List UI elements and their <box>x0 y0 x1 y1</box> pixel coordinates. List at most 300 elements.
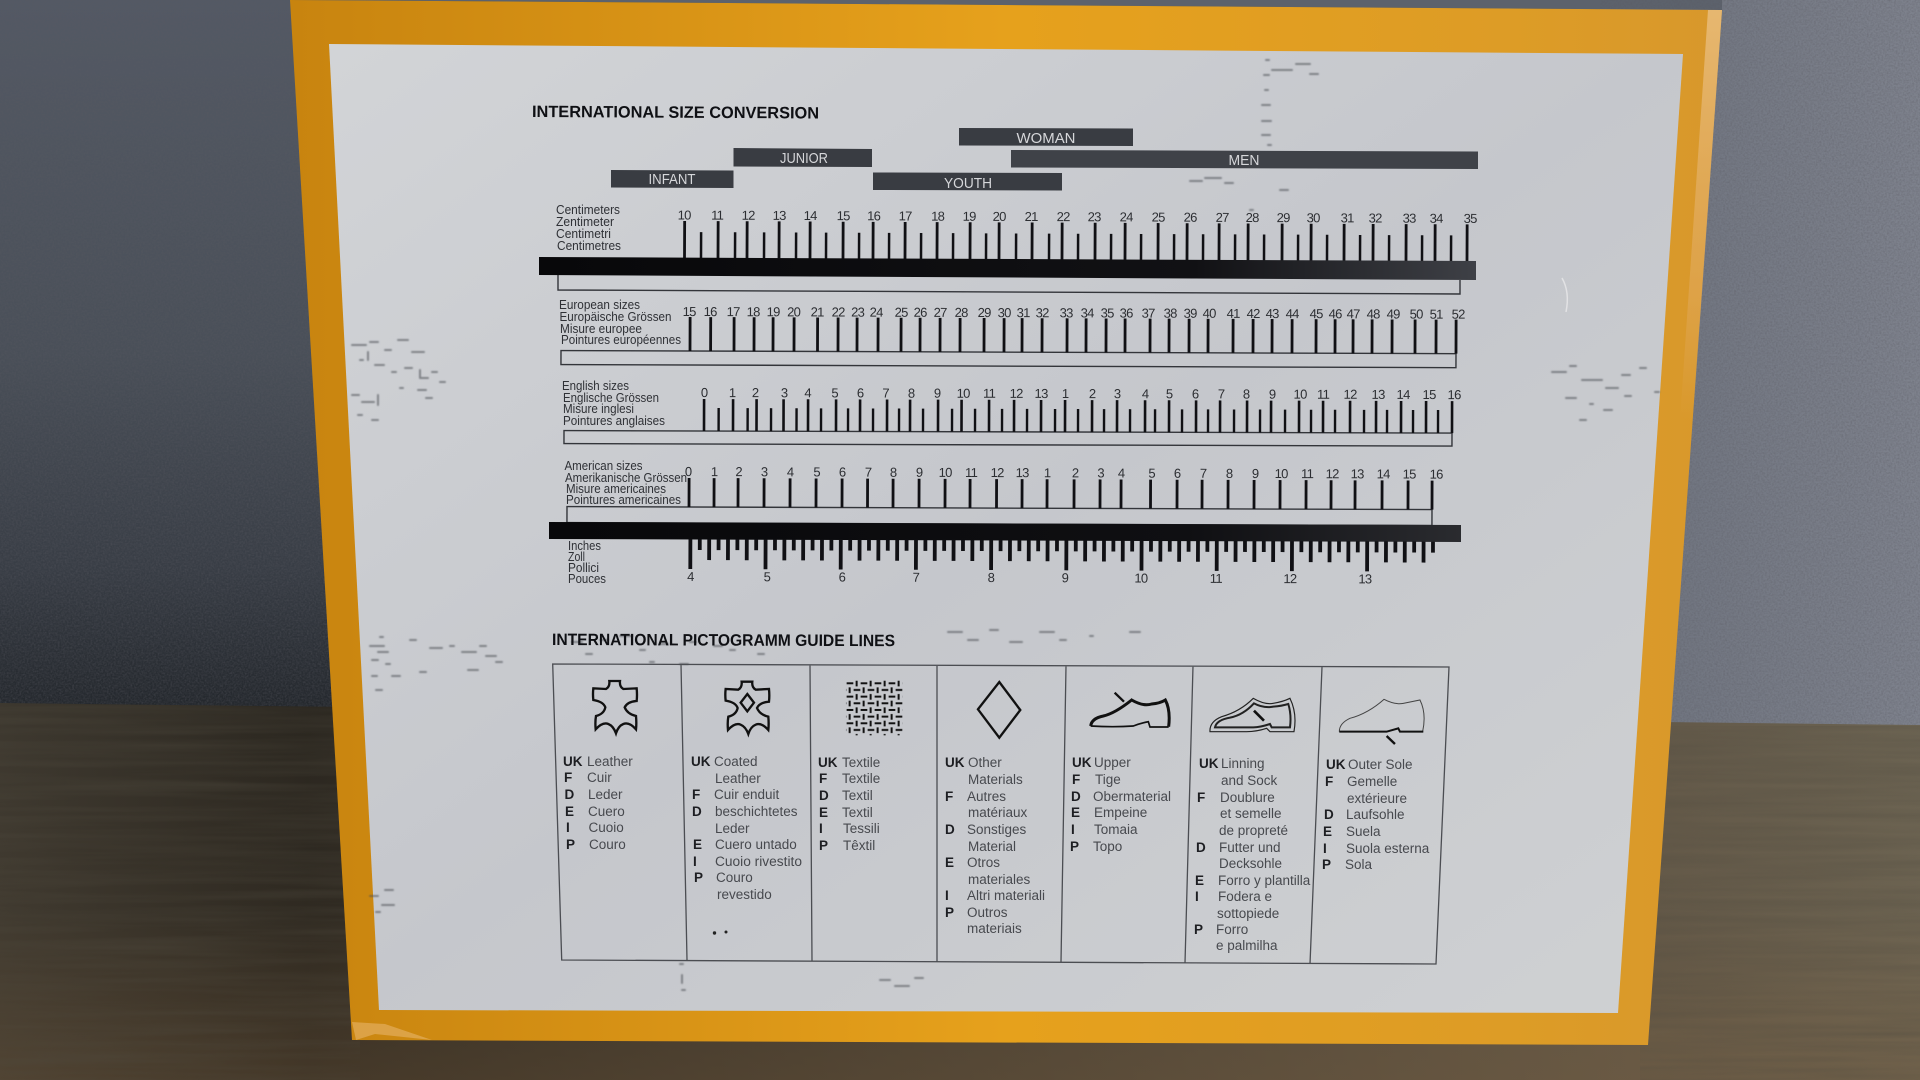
ticks and numbers: english sizes: 12 <box>1344 387 1357 402</box>
text: lining and sock: sottopiede <box>1217 906 1279 921</box>
ticks and numbers: centimeters: 18 <box>931 209 945 224</box>
bar: woman <box>959 128 1133 147</box>
icon: coated leather hide <box>725 682 769 734</box>
text: other materials <box>945 755 1045 936</box>
heavy black bar: centimeters <box>539 257 1476 280</box>
pictogram table <box>553 664 1449 964</box>
bar: junior: JUNIOR <box>780 150 828 167</box>
text: coated leather: Cuir enduit <box>714 787 780 802</box>
ticks and numbers: american sizes: 11 <box>965 465 978 480</box>
labels: centimeters: Zentimeter <box>556 215 614 229</box>
ticks and numbers: european sizes: 35 <box>1101 305 1114 320</box>
ticks and numbers: inches: 7 <box>913 570 920 585</box>
text: outer sole: D <box>1324 807 1334 822</box>
ticks and numbers: centimeters: 33 <box>1403 211 1416 226</box>
text: lining and sock: e palmilha <box>1216 938 1278 953</box>
text: leather: UK <box>563 754 583 769</box>
text: other materials: P <box>945 905 954 920</box>
ticks and numbers: english sizes <box>564 385 1461 446</box>
ticks and numbers: american sizes: 16 <box>1430 467 1443 482</box>
background: top wall strip <box>290 0 1722 10</box>
ruler: european sizes <box>559 298 1465 368</box>
ticks and numbers: european sizes: 27 <box>934 305 947 320</box>
text: leather: F <box>564 770 572 785</box>
ticks and numbers: english sizes: 5 <box>1166 386 1173 401</box>
ticks and numbers: european sizes: 48 <box>1367 306 1380 321</box>
text: outer sole: Sola <box>1345 857 1373 872</box>
ticks and numbers: centimeters: 10 <box>678 207 691 223</box>
column: leather <box>563 681 637 852</box>
ticks and numbers: european sizes: 31 <box>1017 305 1030 320</box>
ticks and numbers: american sizes: 3 <box>1097 465 1104 480</box>
text: coated leather: Couro <box>716 870 753 885</box>
labels: inches: Pollici <box>568 561 599 575</box>
ticks and numbers: european sizes: 22 <box>832 304 845 320</box>
ticks and numbers: european sizes: 43 <box>1266 306 1279 321</box>
ticks and numbers: european sizes: 39 <box>1184 306 1197 321</box>
text: leather: Leder <box>588 787 623 802</box>
ticks and numbers: american sizes: 2 <box>735 464 742 479</box>
text: lining and sock: I <box>1195 889 1199 904</box>
ticks and numbers: european sizes: 40 <box>1203 306 1216 321</box>
text: leather: D <box>564 787 574 802</box>
text: coated leather: revestido <box>717 887 772 902</box>
text: coated leather: beschichtetes <box>715 804 798 819</box>
icon: shoe upper <box>1091 693 1169 727</box>
labels: centimeters: Centimeters <box>556 203 620 217</box>
text: other materials: Material <box>968 839 1016 854</box>
ticks and numbers: european sizes: 25 <box>895 305 908 320</box>
ticks and numbers: european sizes: 17 <box>727 304 740 319</box>
ticks and numbers: european sizes: 52 <box>1452 307 1465 322</box>
heavy black bar: inches <box>549 522 1461 542</box>
text: textile: P <box>819 838 828 853</box>
ticks and numbers: european sizes: 20 <box>787 304 801 319</box>
ticks and numbers: centimeters: 16 <box>867 208 881 223</box>
text: lining and sock <box>1194 756 1311 953</box>
ticks and numbers: centimeters: 29 <box>1277 210 1290 225</box>
bar: infant: INFANT <box>648 171 696 188</box>
ticks and numbers: european sizes: 50 <box>1410 307 1423 322</box>
ticks and numbers: inches <box>687 539 1433 587</box>
ticks and numbers: centimeters: 21 <box>1025 209 1038 224</box>
ticks and numbers: centimeters: 32 <box>1369 210 1382 226</box>
title: international pictogramm guide lines: INTERNATIONAL PICTOGRAMM GUIDE LINES <box>552 631 895 650</box>
ticks and numbers: european sizes: 36 <box>1120 305 1133 321</box>
ticks and numbers: centimeters: 28 <box>1246 210 1259 225</box>
labels: english sizes: Englische Grössen <box>563 391 659 405</box>
ticks and numbers: english sizes: 4 <box>804 385 811 400</box>
ticks and numbers: english sizes: 12 <box>1010 386 1023 401</box>
ticks and numbers: centimeters: 31 <box>1341 210 1354 225</box>
ticks and numbers: european sizes: 33 <box>1060 305 1073 320</box>
ticks and numbers: american sizes: 6 <box>1174 466 1181 481</box>
ticks and numbers: american sizes: 11 <box>1301 466 1314 481</box>
text: leather: Leather <box>587 754 633 769</box>
ticks and numbers: american sizes: 12 <box>1326 466 1339 481</box>
text: coated leather: F <box>692 787 700 802</box>
text: textile: I <box>819 821 823 836</box>
ticks and numbers: english sizes: 3 <box>1114 386 1121 401</box>
text: lining and sock: UK <box>1199 756 1219 771</box>
ticks and numbers: european sizes: 45 <box>1310 306 1323 321</box>
ticks and numbers: english sizes: 10 <box>957 386 970 401</box>
background: left wall <box>0 0 400 710</box>
two dots <box>713 930 728 935</box>
text: lining and sock: Futter und <box>1219 840 1281 855</box>
text: outer sole: P <box>1322 857 1331 872</box>
text: coated leather: UK <box>691 754 711 769</box>
text: upper: UK <box>1072 755 1092 770</box>
text: coated leather: Leder <box>715 821 750 836</box>
ticks and numbers: american sizes: 3 <box>761 464 768 479</box>
icon: shoe lining <box>1210 698 1295 732</box>
ticks and numbers: english sizes: 4 <box>1142 386 1149 401</box>
ticks and numbers: centimeters: 23 <box>1088 209 1101 224</box>
ticks and numbers: american sizes: 6 <box>839 465 846 480</box>
text: upper: D <box>1071 789 1081 804</box>
text: upper: Upper <box>1094 755 1131 770</box>
labels: american sizes: Pointures americaines <box>566 493 681 507</box>
ticks and numbers: european sizes: 32 <box>1036 305 1049 320</box>
text: other materials: Other <box>968 755 1002 770</box>
ticks and numbers: english sizes: 1 <box>729 385 736 400</box>
text: textile: Tessili <box>843 821 880 836</box>
text: coated leather <box>691 754 802 902</box>
text: textile: UK <box>818 755 838 770</box>
ticks and numbers: european sizes: 21 <box>811 304 824 319</box>
ticks and numbers: centimeters <box>677 207 1477 261</box>
ticks and numbers: american sizes: 5 <box>1148 466 1155 481</box>
ticks and numbers: european sizes: 37 <box>1142 306 1155 321</box>
text: lining and sock: E <box>1195 873 1204 888</box>
ticks and numbers: european sizes: 15 <box>683 304 696 319</box>
text: upper: I <box>1071 822 1075 837</box>
ticks and numbers: european sizes: 44 <box>1286 306 1299 321</box>
ticks and numbers: european sizes <box>561 304 1465 368</box>
text: other materials: Otros <box>967 855 1000 870</box>
ticks and numbers: english sizes: 9 <box>934 386 941 401</box>
box right edge highlight <box>1680 10 1722 420</box>
ticks and numbers: european sizes: 47 <box>1347 306 1360 321</box>
ticks and numbers: centimeters: 25 <box>1152 210 1165 225</box>
icon: shoe outer sole <box>1339 699 1424 744</box>
ticks and numbers: european sizes: 30 <box>998 305 1011 320</box>
ticks and numbers: american sizes: 9 <box>916 465 923 480</box>
text: other materials: Outros <box>967 905 1008 920</box>
text: textile: Textile <box>842 771 880 786</box>
ticks and numbers: centimeters: 30 <box>1307 210 1320 225</box>
text: other materials: E <box>945 855 954 870</box>
text: lining and sock: D <box>1196 840 1206 855</box>
ticks and numbers: european sizes: 19 <box>767 304 780 319</box>
ticks and numbers: american sizes: 10 <box>939 465 952 480</box>
ruler: inches <box>549 522 1461 587</box>
labels: european sizes: European sizes <box>559 298 640 312</box>
ticks and numbers: european sizes: 28 <box>955 305 968 320</box>
text: coated leather: Cuero untado <box>715 837 797 852</box>
text: outer sole: I <box>1323 841 1327 856</box>
column: outer sole <box>1322 699 1430 872</box>
ticks and numbers: american sizes: 8 <box>1226 466 1233 481</box>
ticks and numbers: european sizes: 38 <box>1164 306 1177 321</box>
column: lining and sock <box>1194 698 1311 953</box>
text: upper <box>1070 755 1171 854</box>
background: table surface <box>0 703 1920 1080</box>
ticks and numbers: centimeters: 26 <box>1184 210 1197 225</box>
text: leather <box>563 754 633 852</box>
white label panel <box>329 44 1683 1013</box>
icon: leather hide <box>593 681 637 733</box>
text: outer sole: Outer Sole <box>1348 757 1413 772</box>
text: outer sole: F <box>1325 774 1333 789</box>
labels: english sizes: Misure inglesi <box>563 402 634 416</box>
text: leather: Cuero <box>588 804 625 819</box>
title: international size conversion: INTERNATIONAL SIZE CONVERSION <box>532 103 819 123</box>
box corner tear <box>352 1022 432 1040</box>
ticks and numbers: english sizes: 14 <box>1397 387 1410 402</box>
paper crease <box>1562 278 1567 312</box>
ticks and numbers: inches: 5 <box>764 569 771 584</box>
text: coated leather: Coated <box>714 754 758 769</box>
ticks and numbers: american sizes: 2 <box>1072 465 1079 480</box>
text: upper: Topo <box>1093 839 1122 854</box>
text: lining and sock: Decksohle <box>1219 856 1282 871</box>
labels: european sizes: Pointures européennes <box>561 333 681 347</box>
ticks and numbers: american sizes: 9 <box>1252 466 1259 481</box>
labels: american sizes <box>564 459 687 507</box>
ticks and numbers: american sizes: 8 <box>890 465 897 480</box>
ticks and numbers: american sizes: 1 <box>1044 465 1051 480</box>
background: right wall <box>1600 0 1920 730</box>
text: outer sole: Suola esterna <box>1346 841 1430 856</box>
bar: woman: WOMAN <box>1016 130 1076 147</box>
ticks and numbers: english sizes: 8 <box>1243 387 1250 402</box>
labels: english sizes <box>562 379 665 428</box>
ticks and numbers: english sizes: 16 <box>1448 387 1461 402</box>
ticks and numbers: centimeters: 27 <box>1216 210 1229 225</box>
ticks and numbers: centimeters: 15 <box>837 208 850 223</box>
text: textile: Textil <box>842 805 873 820</box>
ticks and numbers: american sizes: 4 <box>787 464 794 479</box>
text: other materials: I <box>945 888 949 903</box>
ticks and numbers: american sizes <box>567 464 1443 526</box>
text: upper: Tige <box>1095 772 1121 787</box>
ticks and numbers: centimeters: 24 <box>1120 209 1133 224</box>
icon: diamond <box>978 682 1020 738</box>
ticks and numbers: english sizes: 3 <box>781 385 788 400</box>
labels: inches: Zoll <box>568 550 585 564</box>
ticks and numbers: english sizes: 6 <box>857 385 864 400</box>
ticks and numbers: english sizes: 7 <box>1218 386 1225 401</box>
text: upper: Tomaia <box>1094 822 1138 837</box>
labels: american sizes: Misure americaines <box>566 482 666 496</box>
ticks and numbers: centimeters: 17 <box>899 208 912 223</box>
text: outer sole: Laufsohle <box>1346 807 1405 822</box>
text: other materials: Materials <box>968 772 1023 787</box>
ticks and numbers: american sizes: 1 <box>711 464 718 479</box>
ticks and numbers: english sizes: 7 <box>882 385 889 401</box>
text: other materials: Sonstiges <box>967 822 1027 837</box>
ticks and numbers: english sizes: 13 <box>1372 387 1385 402</box>
ticks and numbers: european sizes: 51 <box>1430 307 1443 322</box>
text: other materials: materiales <box>968 872 1031 887</box>
ticks and numbers: inches: 13 <box>1358 571 1372 586</box>
text: textile: D <box>819 788 829 803</box>
ticks and numbers: european sizes: 26 <box>914 305 927 320</box>
text: textile <box>818 755 880 853</box>
column: other materials <box>945 682 1045 936</box>
text: outer sole: Gemelle <box>1347 774 1397 789</box>
text: textile: Textil <box>842 788 873 803</box>
ticks and numbers: centimeters: 20 <box>993 209 1006 224</box>
ticks and numbers: centimeters: 34 <box>1430 211 1443 226</box>
ticks and numbers: american sizes: 5 <box>813 464 820 479</box>
text: coated leather: Leather <box>715 771 761 786</box>
ticks and numbers: centimeters: 12 <box>742 208 755 223</box>
ticks and numbers: inches: 10 <box>1134 571 1148 586</box>
text: upper: P <box>1070 839 1079 854</box>
ticks and numbers: american sizes: 0 <box>685 464 692 479</box>
labels: european sizes: Misure europee <box>560 322 642 336</box>
labels: american sizes: American sizes <box>564 459 642 473</box>
ticks and numbers: european sizes: 34 <box>1081 305 1094 320</box>
ticks and numbers: european sizes: 46 <box>1329 306 1342 321</box>
text: lining and sock: Doublure <box>1220 790 1275 805</box>
ticks and numbers: english sizes: 2 <box>1089 386 1096 401</box>
text: other materials: F <box>945 789 953 804</box>
labels: inches: Pouces <box>568 572 606 586</box>
text: lining and sock: Linning <box>1221 756 1265 771</box>
labels: centimeters: Centimetri <box>556 227 611 241</box>
text: lining and sock: P <box>1194 922 1203 937</box>
ticks and numbers: english sizes: 10 <box>1294 387 1307 402</box>
bar: infant <box>611 170 734 188</box>
ticks and numbers: english sizes: 13 <box>1035 386 1048 401</box>
text: outer sole: UK <box>1326 757 1346 772</box>
labels: inches <box>568 539 606 586</box>
ticks and numbers: english sizes: 8 <box>908 386 915 401</box>
ticks and numbers: english sizes: 5 <box>831 385 838 400</box>
ruler: centimeters <box>539 203 1477 294</box>
text: coated leather: Cuoio rivestito <box>715 854 802 869</box>
ticks and numbers: european sizes: 23 <box>851 305 865 320</box>
text: upper: Obermaterial <box>1093 789 1171 804</box>
ticks and numbers: inches: 4 <box>687 569 694 584</box>
ticks and numbers: centimeters: 13 <box>773 208 786 223</box>
text: lining and sock: Forro y plantilla <box>1218 873 1311 888</box>
text: outer sole: Suela <box>1346 824 1381 839</box>
bar: junior <box>734 148 872 167</box>
ticks and numbers: european sizes: 42 <box>1247 306 1260 321</box>
ticks and numbers: english sizes: 6 <box>1192 386 1199 401</box>
bar: men: MEN <box>1228 152 1260 169</box>
ticks and numbers: american sizes: 7 <box>1200 466 1207 481</box>
text: leather: Cuoio <box>588 820 624 835</box>
ticks and numbers: centimeters: 19 <box>963 209 976 224</box>
ticks and numbers: american sizes: 4 <box>1118 465 1125 481</box>
text: upper: E <box>1071 805 1080 820</box>
text: lining and sock: Fodera e <box>1218 889 1272 904</box>
text: leather: E <box>565 804 574 819</box>
ticks and numbers: american sizes: 15 <box>1403 466 1416 482</box>
text: outer sole: extérieure <box>1347 791 1407 806</box>
frame under centimeter bar <box>558 275 1460 294</box>
ticks and numbers: english sizes: 1 <box>1062 386 1069 401</box>
text: lining and sock: and Sock <box>1221 773 1278 788</box>
text: upper: Empeine <box>1094 805 1147 820</box>
ticks and numbers: centimeters: 22 <box>1057 209 1070 224</box>
text: lining and sock: Forro <box>1216 922 1248 937</box>
ticks and numbers: centimeters: 35 <box>1464 211 1477 226</box>
labels: european sizes <box>559 298 681 347</box>
ticks and numbers: english sizes: 2 <box>752 385 759 400</box>
yellow box <box>290 0 1722 1045</box>
ticks and numbers: english sizes: 11 <box>1317 387 1330 402</box>
text: other materials: materiais <box>967 921 1022 936</box>
text: coated leather: P <box>694 870 703 885</box>
ticks and numbers: inches: 11 <box>1210 571 1222 586</box>
text: textile: F <box>819 771 827 786</box>
text: other materials: matériaux <box>968 805 1028 820</box>
ticks and numbers: american sizes: 10 <box>1275 466 1288 481</box>
ticks and numbers: inches: 12 <box>1283 571 1297 586</box>
text: outer sole: E <box>1323 824 1332 839</box>
text: other materials: UK <box>945 755 965 770</box>
text: leather: P <box>566 837 575 852</box>
ticks and numbers: inches: 8 <box>988 570 995 585</box>
ruler: american sizes <box>564 459 1443 526</box>
column: upper <box>1070 693 1171 854</box>
text: other materials: Autres <box>967 789 1006 804</box>
ticks and numbers: american sizes: 14 <box>1377 466 1390 481</box>
table grid <box>553 664 1449 964</box>
text: lining and sock: F <box>1197 790 1205 805</box>
ticks and numbers: european sizes: 24 <box>870 305 883 320</box>
text: other materials: Altri materiali <box>967 888 1045 903</box>
labels: english sizes: English sizes <box>562 379 629 393</box>
text: coated leather: E <box>693 837 702 852</box>
ticks and numbers: european sizes: 49 <box>1387 306 1400 321</box>
ticks and numbers: european sizes: 41 <box>1227 306 1240 321</box>
ticks and numbers: inches: 6 <box>839 570 846 585</box>
ticks and numbers: inches: 9 <box>1062 570 1069 585</box>
ticks and numbers: english sizes: 15 <box>1423 387 1436 402</box>
labels: centimeters: Centimetres <box>557 239 621 253</box>
text: leather: Cuir <box>587 770 612 785</box>
text: lining and sock: et semelle <box>1220 806 1282 821</box>
labels: american sizes: Amerikanische Grössen <box>565 471 687 485</box>
ticks and numbers: european sizes: 16 <box>704 304 717 319</box>
icon: textile weave <box>846 680 903 735</box>
text: textile: Têxtil <box>843 838 875 853</box>
text: textile: Textile <box>842 755 880 770</box>
bar: youth <box>873 172 1062 192</box>
text: coated leather: D <box>692 804 702 819</box>
bar: youth: YOUTH <box>944 175 992 192</box>
size category bars <box>611 128 1478 192</box>
ticks and numbers: english sizes: 11 <box>983 386 996 401</box>
text: upper: F <box>1072 772 1080 787</box>
ticks and numbers: centimeters: 14 <box>804 208 817 223</box>
text: leather: I <box>566 820 570 835</box>
text: outer sole <box>1322 757 1430 872</box>
labels: european sizes: Europäische Grössen <box>560 310 672 324</box>
ticks and numbers: american sizes: 12 <box>991 465 1004 480</box>
labels: english sizes: Pointures anglaises <box>563 414 665 428</box>
ticks and numbers: american sizes: 13 <box>1351 466 1364 481</box>
bar: men <box>1011 150 1478 169</box>
